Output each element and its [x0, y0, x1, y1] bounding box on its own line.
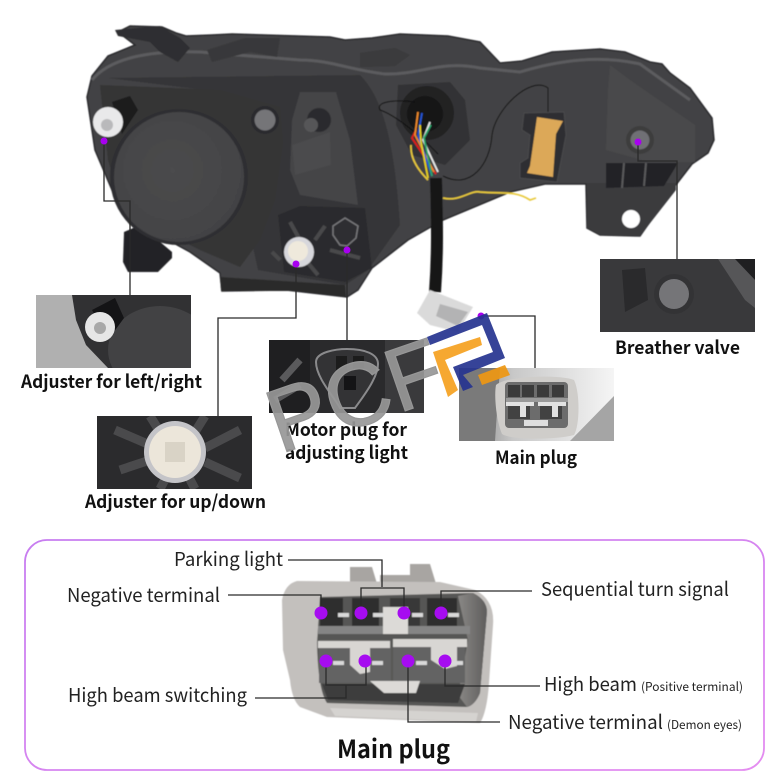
label: high beam positive: High beam: [544, 670, 637, 697]
lower slots: [322, 684, 465, 703]
text: adjusting light: [285, 439, 408, 465]
post pad: [290, 92, 358, 205]
right section body: [395, 75, 610, 235]
yellow wire: [411, 145, 536, 200]
inset: motor plug: [269, 340, 424, 413]
lens cap: [110, 109, 248, 245]
inset: breather valve: [600, 259, 755, 332]
connector opening: [317, 593, 487, 707]
mounting hole: [622, 210, 640, 228]
bottom lip: [330, 708, 478, 722]
pinout leader lines: [228, 560, 540, 722]
logo mark: [427, 313, 510, 397]
colored wires: [412, 112, 438, 178]
bracket slots: [606, 163, 678, 188]
callout markers: [100, 138, 642, 320]
bottom tabs: [220, 277, 346, 297]
up/down adjuster knob: [284, 237, 314, 267]
main cable: [435, 178, 437, 292]
connector top tabs: [350, 564, 437, 587]
watermark: PCF: PCF: [254, 320, 457, 473]
label: high beam positive: [544, 670, 743, 697]
breather valve disc: [626, 126, 654, 154]
rear housing shading: [108, 75, 400, 285]
connector: [417, 290, 473, 332]
label: main plug: Main plug: [495, 444, 577, 470]
label: sequential turn signal: Sequential turn signal: [541, 575, 729, 602]
inset: adjuster for left/right: [36, 295, 191, 368]
headlight assembly: [87, 26, 714, 332]
label: high beam switching: High beam switching: [68, 681, 247, 708]
adjuster block: [278, 206, 372, 282]
left/right adjuster knob: [112, 96, 138, 134]
opening right wall: [458, 593, 487, 707]
label: negative terminal demon eyes: Negative terminal: [508, 708, 663, 735]
callout lines: [104, 141, 677, 416]
post: [307, 108, 331, 132]
lower left mounting bracket: [123, 225, 172, 272]
inset: main plug: [459, 368, 614, 441]
lower right mounting bracket: [587, 183, 676, 236]
label: negative terminal demon eyes: [508, 708, 742, 735]
label: adjuster for left/right: Adjuster for left/right: [20, 368, 202, 394]
panel frame: [25, 540, 764, 770]
top sockets: [320, 598, 343, 626]
bottom sockets: [319, 640, 391, 683]
top rim and clips: [92, 52, 690, 100]
inset: adjuster for up/down: [97, 416, 252, 489]
housing body: [87, 26, 714, 297]
label: high beam positive: (Positive terminal): [641, 678, 743, 695]
pin markers: [314, 606, 452, 668]
right corner panel: [606, 65, 695, 162]
panel heading: Main plug: [337, 730, 450, 766]
gold module frame: [520, 112, 566, 182]
label: motor plug: Motor plug for: [285, 416, 407, 442]
label: breather valve: Breather valve: [615, 334, 740, 360]
gold module: [527, 117, 563, 177]
control wires: [379, 85, 548, 180]
motor plug socket: [333, 218, 358, 246]
label: parking light: Parking light: [174, 545, 283, 572]
connector shell: [282, 581, 493, 723]
label: negative terminal: Negative terminal: [67, 581, 220, 608]
bulb socket: [396, 82, 470, 165]
side cap: [251, 106, 279, 134]
label: negative terminal demon eyes: (Demon eyes): [667, 716, 742, 733]
label: adjuster for up/down: Adjuster for up/down: [84, 488, 266, 514]
panel: main plug pinout: [25, 540, 764, 770]
lens surround: [100, 85, 283, 267]
connector illustration: [282, 564, 493, 723]
